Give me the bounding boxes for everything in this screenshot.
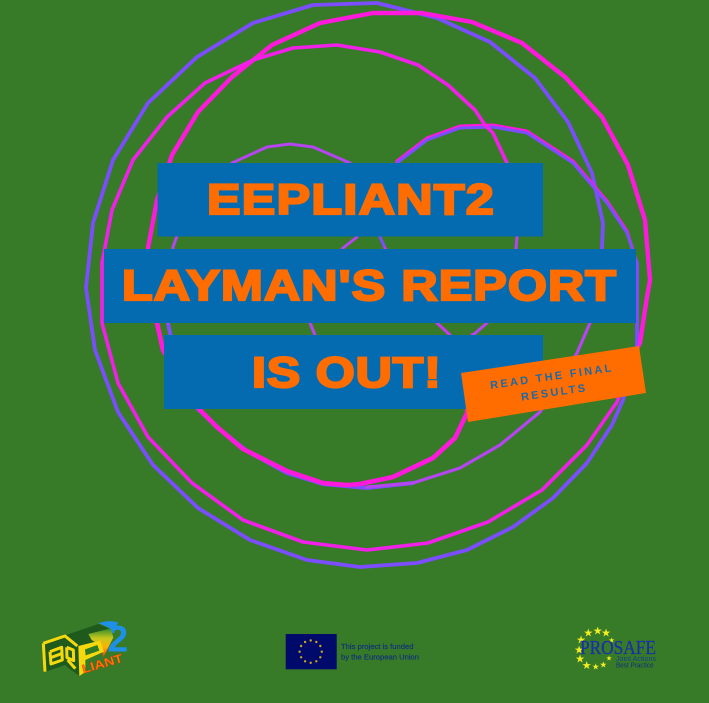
- logo: PROSAFE: PROSAFE: [580, 637, 656, 659]
- star ring: ★: [593, 625, 603, 638]
- star ring: ★: [592, 663, 600, 673]
- callout: read the final results: READ THE FINAL: [489, 362, 614, 392]
- star ring: ★: [574, 643, 584, 656]
- star ring: ★: [575, 652, 585, 665]
- logo: PROSAFE: [574, 625, 656, 673]
- logo: EEPLIANT2: 2: [107, 617, 128, 659]
- logo: EEPLIANT2: LIANT: [80, 651, 125, 676]
- banner: EEPLIANT2: EEPLIANT2: [207, 175, 494, 223]
- logo: EEPLIANT2: [42, 617, 128, 676]
- banner: IS OUT!: [164, 335, 543, 409]
- banner: LAYMAN'S REPORT: [104, 249, 636, 323]
- banner: IS OUT!: IS OUT!: [252, 348, 441, 396]
- callout: read the final results: RESULTS: [520, 382, 588, 404]
- banner: EEPLIANT2: [158, 163, 543, 236]
- EU flag: [286, 634, 337, 669]
- logo: EU flag and funding statement: [286, 634, 419, 669]
- funding statement: [341, 642, 419, 662]
- logo: PROSAFE: Best Practice: [616, 662, 654, 670]
- star ring: ★: [582, 659, 592, 672]
- star ring: ★: [599, 660, 607, 670]
- star ring: ★: [583, 627, 593, 640]
- callout: read the final results: [461, 346, 646, 422]
- funding statement: This project is funded: [341, 642, 414, 651]
- logo: PROSAFE: Joint Actions: [616, 656, 656, 663]
- banner: LAYMAN'S REPORT: LAYMAN'S REPORT: [122, 262, 616, 309]
- star ring: ★: [609, 637, 615, 645]
- funding statement: by the European Union: [341, 652, 419, 662]
- star ring: ★: [601, 627, 611, 640]
- star ring: [574, 625, 615, 673]
- decorative scribble circles: [86, 3, 650, 567]
- star ring: ★: [606, 654, 612, 662]
- star ring: ★: [576, 633, 586, 646]
